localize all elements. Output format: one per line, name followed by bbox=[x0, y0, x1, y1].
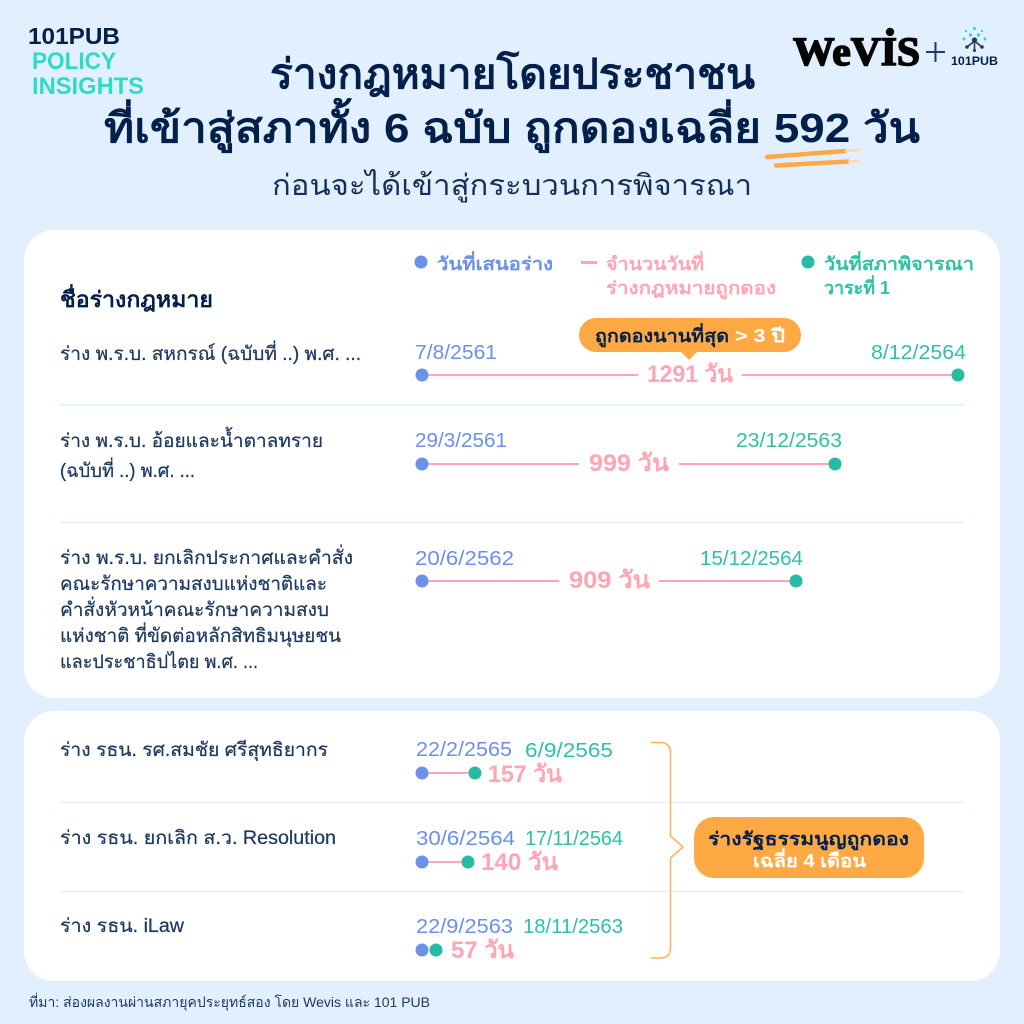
row: sugar bill: ร่าง พ.ร.บ. อ้อยและน้ำตาลทราย bbox=[60, 427, 323, 452]
legend bbox=[414, 251, 974, 300]
callout: longest delay: ถูกดองนานที่สุด bbox=[595, 323, 729, 348]
title: ร่างกฎหมายโดยประชาชน bbox=[270, 50, 755, 97]
logo: 101 PUB Policy Insights: INSIGHTS bbox=[32, 73, 144, 100]
row: NCPO orders repeal bill: 909 วัน bbox=[569, 567, 651, 594]
row: NCPO orders repeal bill: คณะรักษาความสงบแห่งชาติและ bbox=[60, 574, 327, 595]
legend: วาระที่ 1 bbox=[824, 275, 890, 298]
callout: constitutional bills average: เฉลี่ย 4 เดือน bbox=[753, 848, 867, 871]
callout: constitutional bills average bbox=[694, 817, 924, 878]
legend: วันที่เสนอร่าง bbox=[437, 251, 553, 274]
row: senate abolition Resolution bill: ร่าง รธน. ยกเลิก ส.ว. Resolution bbox=[60, 828, 336, 849]
legend: จำนวนวันที่ bbox=[606, 251, 704, 274]
panel: constitutional amendment bills bbox=[24, 711, 1000, 981]
row: senate abolition Resolution bill bbox=[60, 828, 623, 876]
subtitle: ก่อนจะได้เข้าสู่กระบวนการพิจารณา bbox=[272, 168, 752, 203]
callout: longest delay: > 3 ปี bbox=[735, 326, 785, 346]
row: Somchai bill: 6/9/2565 bbox=[525, 740, 613, 762]
row: iLaw bill bbox=[60, 916, 623, 964]
row: senate abolition Resolution bill: 140 วัน bbox=[481, 849, 559, 876]
row: NCPO orders repeal bill: คำสั่งหัวหน้าคณะรักษาความสงบ bbox=[60, 596, 329, 621]
row: NCPO orders repeal bill: ร่าง พ.ร.บ. ยกเลิกประกาศและคำสั่ง bbox=[60, 544, 353, 569]
row: cooperatives bill: 8/12/2564 bbox=[871, 342, 966, 364]
logo: 101 PUB Policy Insights: POLICY bbox=[32, 48, 116, 75]
row: sugar bill: (ฉบับที่ ..) พ.ศ. ... bbox=[60, 457, 195, 482]
title: ที่เข้าสู่สภาทั้ง 6 ฉบับ ถูกดองเฉลี่ย 592 วัน bbox=[104, 98, 920, 154]
row: cooperatives bill: 1291 วัน bbox=[647, 361, 734, 388]
row: cooperatives bill: 7/8/2561 bbox=[415, 342, 497, 364]
row: sugar bill: 29/3/2561 bbox=[415, 430, 507, 452]
row: cooperatives bill bbox=[60, 340, 966, 388]
row: iLaw bill: 22/9/2563 bbox=[416, 916, 513, 938]
callout: constitutional bills average: ร่างรัฐธรรมนูญถูกดอง bbox=[708, 829, 909, 851]
heading: bill name column: ชื่อร่างกฎหมาย bbox=[60, 283, 213, 312]
row: senate abolition Resolution bill: 17/11/2564 bbox=[525, 828, 623, 850]
row: NCPO orders repeal bill bbox=[60, 544, 803, 673]
bracket bbox=[651, 742, 683, 958]
logo: WeVis + 101 PUB bbox=[793, 27, 998, 74]
row: sugar bill: 23/12/2563 bbox=[736, 430, 842, 452]
row: cooperatives bill: ร่าง พ.ร.บ. สหกรณ์ (ฉบับที่ ..) พ.ศ. ... bbox=[60, 340, 361, 365]
row: NCPO orders repeal bill: 20/6/2562 bbox=[415, 548, 514, 570]
row: Somchai bill: 157 วัน bbox=[488, 761, 563, 788]
row: NCPO orders repeal bill: แห่งชาติ ที่ขัดต่อหลักสิทธิมนุษยชน bbox=[60, 622, 341, 648]
panel: ordinary bills bbox=[24, 230, 1000, 698]
source: ที่มา: ส่องผลงานผ่านสภายุคประยุทธ์สอง โดย Wevis และ 101 PUB bbox=[29, 993, 430, 1011]
row: Somchai bill bbox=[60, 739, 613, 788]
row: iLaw bill: 57 วัน bbox=[451, 937, 515, 964]
row: NCPO orders repeal bill: 15/12/2564 bbox=[700, 548, 803, 570]
row: senate abolition Resolution bill: 30/6/2564 bbox=[416, 828, 515, 850]
title bbox=[104, 50, 920, 154]
row: sugar bill bbox=[60, 427, 842, 482]
row: Somchai bill: ร่าง รธน. รศ.สมชัย ศรีสุทธิยากร bbox=[60, 739, 328, 762]
row: Somchai bill: 22/2/2565 bbox=[416, 739, 512, 761]
highlight: orange scribble under 592 bbox=[767, 150, 860, 166]
logo: WeVis + 101 PUB: WeVIS bbox=[793, 29, 920, 74]
logo: 101 PUB Policy Insights: 101PUB bbox=[28, 23, 120, 49]
legend: ร่างกฎหมายถูกดอง bbox=[606, 278, 776, 300]
row: sugar bill: 999 วัน bbox=[589, 450, 670, 477]
callout: longest delay bbox=[579, 318, 801, 360]
row: NCPO orders repeal bill: และประชาธิปไตย พ.ศ. ... bbox=[60, 651, 258, 673]
row: iLaw bill: 18/11/2563 bbox=[523, 916, 623, 938]
logo: WeVis + 101 PUB: 101PUB bbox=[951, 54, 998, 68]
logo: 101 PUB Policy Insights bbox=[28, 23, 144, 100]
row: iLaw bill: ร่าง รธน. iLaw bbox=[60, 916, 184, 937]
legend: วันที่สภาพิจารณา bbox=[824, 251, 974, 274]
